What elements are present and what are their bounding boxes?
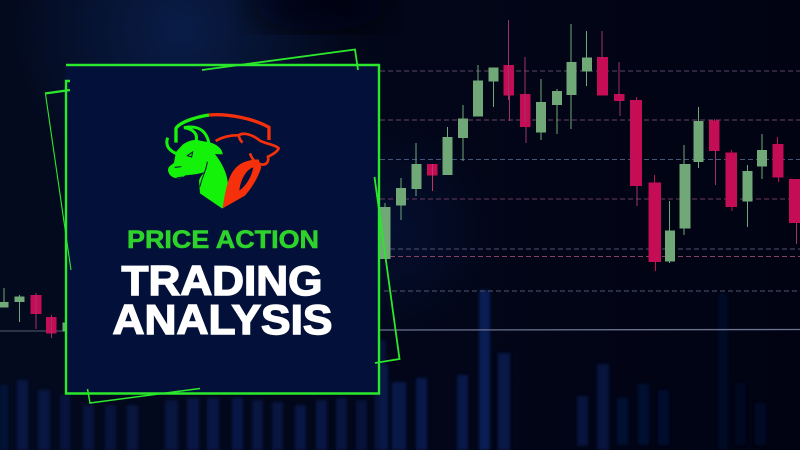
shield arc green (176, 115, 209, 143)
title panel (45, 50, 400, 403)
volume bars (0, 290, 766, 450)
bear body (223, 159, 261, 208)
shield arc red (209, 115, 269, 140)
candlestick chart right (380, 20, 800, 271)
bull horns (167, 127, 209, 155)
candlestick chart left (0, 288, 70, 338)
heading: trading analysis: TRADING (122, 257, 322, 304)
bear head (216, 134, 279, 165)
heading: trading analysis (112, 257, 332, 343)
heading: price action: PRICE ACTION (127, 226, 319, 254)
logo: bull and bear shield (167, 115, 279, 208)
price level lines (380, 71, 800, 291)
bull details (175, 152, 207, 187)
horizontal baseline (0, 330, 800, 331)
bull head and body (168, 140, 228, 208)
heading: trading analysis: ANALYSIS (112, 296, 332, 343)
panel frame (45, 50, 400, 403)
